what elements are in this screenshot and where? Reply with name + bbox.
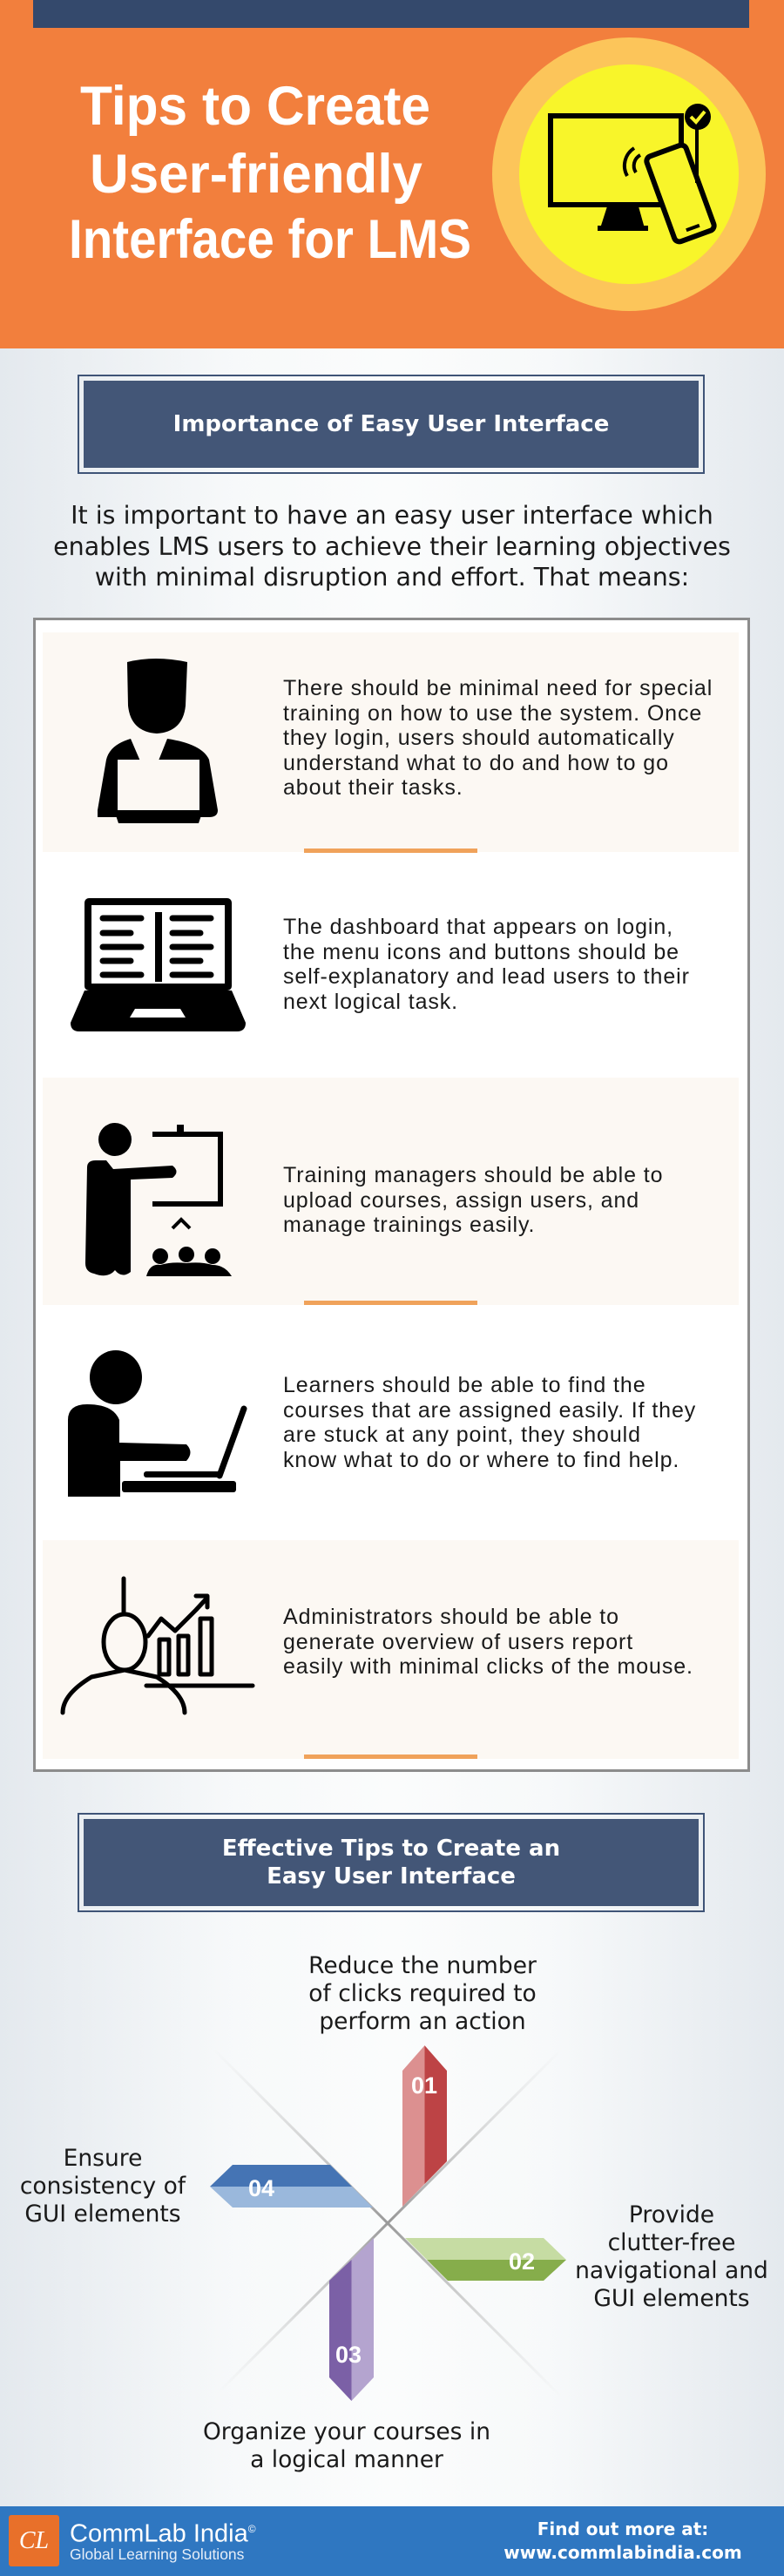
tip 01 text [308, 1952, 537, 2035]
tip 01 text: of clicks required to [308, 1980, 537, 2007]
tip 02 text: GUI elements [593, 2285, 750, 2312]
text: row 5: easily with minimal clicks of the mouse. [283, 1654, 693, 1679]
tip 03 text [203, 2418, 490, 2473]
section heading: effective tips [78, 1813, 705, 1912]
arrow 02 [405, 2238, 566, 2281]
section heading: importance: Importance of Easy User Interface [173, 411, 609, 437]
text: row 1: about their tasks. [283, 775, 463, 800]
text: row 3: Training managers should be able to [283, 1163, 663, 1187]
text: row 5 [283, 1605, 693, 1679]
text: row 2: next logical task. [283, 990, 458, 1014]
text: row 3 [283, 1163, 663, 1237]
section heading: importance [78, 375, 705, 474]
arrow 04 [210, 2165, 373, 2208]
text: row 2: The dashboard that appears on login, [283, 915, 673, 939]
intro text: with minimal disruption and effort. That means: [95, 563, 689, 592]
section heading: effective tips: Effective Tips to Create an [222, 1836, 560, 1862]
text: row 2: self-explanatory and lead users to their [283, 964, 690, 989]
tip 04 text: consistency of [20, 2173, 186, 2200]
row 4 [43, 1305, 739, 1540]
text: row 1: There should be minimal need for special [283, 676, 713, 700]
tip 02 text: Provide [629, 2201, 714, 2228]
tip 03 text: Organize your courses in [203, 2418, 490, 2445]
row 5 [43, 1540, 739, 1759]
tip 04 text: GUI elements [24, 2201, 181, 2228]
tip 02 text: clutter-free [608, 2229, 735, 2256]
arrow 04: 04 [248, 2175, 274, 2201]
title: Tips to Create [80, 76, 430, 137]
text: row 5: Administrators should be able to [283, 1605, 619, 1629]
intro text: enables LMS users to achieve their learning objectives [53, 531, 731, 561]
text: row 3: upload courses, assign users, and [283, 1188, 639, 1213]
text: row 3: manage trainings easily. [283, 1213, 535, 1237]
find out more [504, 2519, 742, 2563]
text: row 2 [283, 915, 690, 1014]
find out more: www.commlabindia.com [504, 2542, 742, 2563]
tip 01 text: Reduce the number [308, 1952, 537, 1979]
text: row 1 [283, 676, 713, 800]
tip 03 text: a logical manner [250, 2446, 443, 2473]
text: row 2: the menu icons and buttons should be [283, 940, 679, 964]
logo [9, 2515, 59, 2566]
icon: learner at laptop [68, 1350, 247, 1497]
header: orange banner [0, 0, 784, 348]
icon: person at laptop [98, 659, 218, 823]
icon: presenter with board [85, 1123, 232, 1276]
title: User-friendly [90, 144, 422, 205]
tip 04 text: Ensure [64, 2145, 142, 2172]
text: row 1: training on how to use the system. Once [283, 701, 702, 726]
footer [0, 2506, 784, 2576]
icon: laptop dashboard [71, 898, 246, 1031]
footer: Global Learning Solutions [70, 2546, 244, 2563]
brand text: CommLab India© [70, 2520, 256, 2548]
logo: CL [19, 2527, 49, 2554]
text: row 4: Learners should be able to find the [283, 1373, 646, 1397]
arrow 03: 03 [335, 2342, 362, 2368]
arrow 01 [402, 2045, 447, 2207]
tip 01 text: perform an action [319, 2008, 526, 2035]
arrow 03 [329, 2238, 374, 2401]
title: Interface for LMS [69, 209, 471, 270]
icon: administrator with chart [61, 1577, 254, 1714]
tip 02 text: navigational and [575, 2257, 768, 2284]
find out more: Find out more at: [537, 2519, 708, 2539]
top navy bar [33, 0, 749, 28]
text: row 4 [283, 1373, 696, 1472]
arrow 01: 01 [411, 2072, 437, 2099]
text: row 4: are stuck at any point, they should [283, 1423, 641, 1447]
text: row 1: they login, users should automatically [283, 726, 675, 750]
title [69, 76, 471, 270]
tip 04 text [20, 2145, 186, 2228]
text: row 4: know what to do or where to find help. [283, 1448, 679, 1472]
chart: four tip arrows [210, 2045, 566, 2401]
icon: monitor and phone in yellow circle [492, 37, 766, 311]
row 2 [43, 852, 739, 1078]
text: row 5: generate overview of users report [283, 1630, 633, 1654]
text: row 4: courses that are assigned easily. If they [283, 1398, 696, 1423]
arrow 02: 02 [509, 2248, 535, 2275]
panel: list of points [33, 618, 750, 1772]
section heading: effective tips: Easy User Interface [267, 1863, 516, 1890]
intro text [53, 501, 731, 592]
tip 02 text [575, 2201, 768, 2312]
row 1 [43, 632, 739, 852]
text: row 1: understand what to do and how to go [283, 751, 669, 775]
intro text: It is important to have an easy user interface which [71, 501, 713, 530]
row 3 [43, 1078, 739, 1305]
